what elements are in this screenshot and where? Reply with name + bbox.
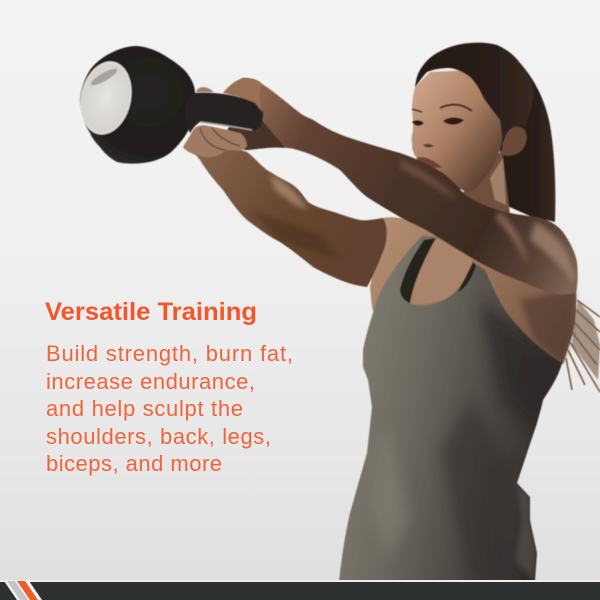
kettlebell [74, 46, 195, 164]
inner bra [400, 238, 436, 303]
kettlebell ball [80, 46, 195, 164]
lower arm [194, 149, 388, 288]
orange stripe [17, 581, 38, 600]
ear [502, 127, 527, 156]
face scuff [89, 66, 119, 88]
kettlebell flat face [74, 57, 138, 139]
finger creases [200, 128, 240, 150]
elbow highlight [270, 175, 308, 210]
grey stripe [7, 581, 28, 600]
tank fabric shading [440, 400, 510, 581]
ponytail [500, 63, 600, 392]
finger tips over handle [223, 78, 263, 113]
bar light edge [0, 580, 600, 582]
hand and handle [183, 78, 285, 157]
bicep highlight [495, 212, 528, 265]
body text: biceps, and more [46, 451, 222, 476]
palm shadow [222, 120, 285, 150]
dark bar [0, 582, 600, 600]
body text: increase endurance, [46, 369, 255, 394]
white stripe [4, 581, 42, 600]
body text: Build strength, burn fat, [46, 341, 293, 366]
heading: Versatile Training [45, 298, 257, 326]
handle [186, 93, 263, 133]
body text [46, 341, 293, 476]
face [412, 70, 508, 192]
upper arm [240, 70, 585, 300]
right bra edge [458, 262, 476, 292]
hair cap [415, 43, 533, 143]
eyes, brows, nose, lips [412, 105, 472, 168]
top finger [196, 87, 214, 92]
shoulder shadow on torso [520, 290, 575, 363]
shoulder highlight [530, 222, 575, 285]
bottom bar [0, 580, 600, 600]
fingers under handle [183, 125, 247, 157]
handle highlight [200, 122, 252, 130]
torso skin [370, 217, 576, 364]
neck [440, 150, 510, 240]
chest skin [410, 238, 473, 304]
woman figure [180, 43, 600, 585]
body text: shoulders, back, legs, [46, 424, 271, 449]
neck light stripe [490, 158, 506, 205]
tank top [338, 234, 562, 580]
body text: and help sculpt the [46, 396, 243, 421]
